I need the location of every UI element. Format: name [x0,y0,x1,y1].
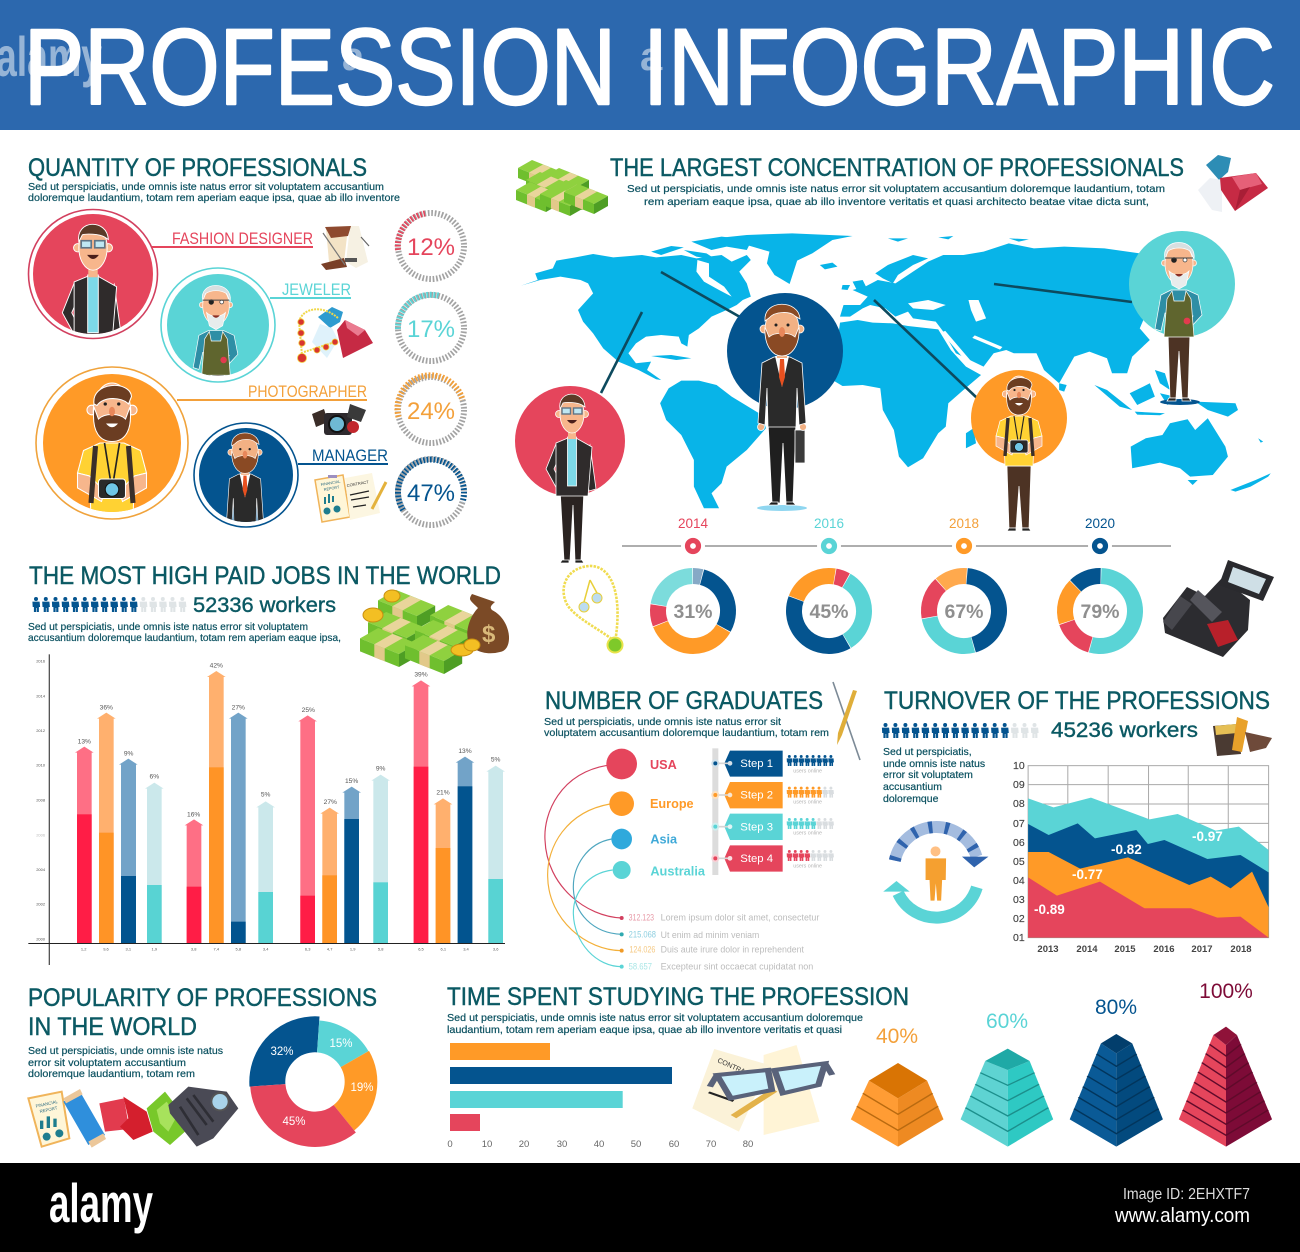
x axis labels [81,946,499,951]
percent labels: 5% [491,757,501,764]
icon: clipboard report and contract: REPORT [323,485,340,492]
percent labels: 25% [302,707,315,714]
x axis labels: 5,8 [236,946,242,951]
icons: report, spools, gems, camera [28,1087,238,1148]
y axis labels: 2008 [36,797,46,802]
icon: gems [1198,155,1268,212]
area chart value labels: -0.97 [1192,829,1223,844]
y axis labels: 2002 [36,902,46,907]
label: fashion designer: FASHION DESIGNER [172,230,313,248]
donut: 31%: 31% [673,601,713,623]
watermark text in banner: a [640,35,663,79]
icon: necklace and gems [298,307,373,362]
donut: 45% [781,563,877,659]
workers count: 45236: 45236 workers [1051,719,1198,742]
bar chart axis labels: 0 [447,1139,453,1150]
bar chart axis labels [447,1139,753,1150]
x axis labels: 3,1 [126,946,132,951]
heading: largest concentration: THE LARGEST CONCENTRATION OF PROFESSIONALS [610,154,1184,182]
x axis labels: 1,2 [81,946,87,951]
users online captions [793,768,822,869]
percent labels: 16% [187,812,200,819]
portrait: fashion designer [28,208,158,340]
description: high paid: Sed ut perspiciatis, unde omnis iste natus error sit voluptatem [28,621,308,633]
area chart y axis: 02 [1013,913,1025,925]
years: 2020 [1085,516,1115,531]
step 1 pictogram [787,755,834,766]
description: largest concentration: rem aperiam eaque ipsa, quae ab illo inventore veritatis et quasi architecto beatae vitae dicta sunt, [644,196,1149,208]
pyramid: 100%: 100% [1199,980,1253,1003]
description: popularity: doloremque laudantium, totam rem [28,1068,195,1080]
description: time spent: Sed ut perspiciatis, unde omnis iste natus error sit voluptatem accusantium doloremque [447,1012,863,1024]
step 3: Step 3 [740,821,773,833]
description: largest concentration [627,183,1165,208]
percent labels: 9% [376,766,386,773]
pyramid: 60%: 60% [986,1010,1028,1033]
x axis labels: 6,5 [418,946,425,951]
x axis labels: 7,4 [214,946,220,951]
statistics list: Ut enim ad minim veniam [661,930,759,940]
bar chart axis labels: 50 [631,1139,641,1150]
x axis labels: 9,6 [103,946,110,951]
label: photographer: PHOTOGRAPHER [248,383,367,401]
portrait: jeweler [160,267,276,383]
area chart y axis: 08 [1013,798,1025,810]
area chart y axis: 09 [1013,779,1025,791]
icon: camera lens and flash [1163,560,1274,657]
connecting curves [545,765,622,967]
step 3 pictogram [787,818,834,829]
icon: clipboard report and contract: FINANCIAL [320,480,341,487]
description: time spent [447,1012,863,1036]
horizontal bar chart [447,1043,753,1150]
axes [28,654,505,965]
bar chart axis labels: 80 [743,1139,753,1150]
timeline [622,516,1171,558]
watermark text in banner [0,25,663,88]
step 2: Step 2 [740,790,773,802]
description: high paid: accusantium doloremque laudantium, totam rem aperiam eaque ipsa, [28,632,341,644]
area chart y axis: 01 [1013,932,1025,944]
panel: most high paid jobs [28,562,509,965]
region names [650,758,706,878]
icon: clipboard report and contract [315,473,386,522]
y axis labels [36,658,46,942]
x axis labels: 6,3 [305,946,311,951]
description: quantity: Sed ut perspiciatis, unde omnis iste natus error sit voluptatem accusantium [28,181,384,193]
years: 2016 [814,516,844,531]
icons: report, spools, gems, camera: FINANCIAL [35,1099,59,1109]
bar chart axis labels: 70 [706,1139,716,1150]
footer bar with stock attribution [0,1163,1300,1252]
area chart y axis [1013,760,1025,944]
donut: 79% [1051,562,1149,660]
area chart x axis: 2015 [1114,944,1136,955]
icon: needle and pen [833,682,860,760]
description: graduates: Sed ut perspiciatis, unde omnis iste natus error sit [544,716,781,728]
description: popularity [28,1045,223,1080]
image id: Image ID: 2EHXTF7 [1123,1186,1250,1203]
donut: 79%: 79% [1080,601,1120,623]
x axis labels: 4,7 [327,946,333,951]
area chart y axis: 10 [1013,760,1025,772]
logo text: alamy [49,1172,153,1234]
percent labels: 21% [436,790,450,797]
pictogram: workers 45236 [882,723,1039,738]
title: PROFESSION [24,6,616,127]
statistics list: Lorem ipsum dolor sit amet, consectetur [661,913,819,923]
gauge: 47%: 47% [407,480,455,507]
region names: Asia [650,833,678,847]
step 2 pictogram [787,787,834,798]
icon: money and coin bag [360,590,509,674]
donut: 45%: 45% [809,601,849,623]
description: turnover: unde omnis iste natus [883,758,985,770]
icon: spool and pattern [321,226,369,270]
panel: largest concentration of professionals [515,154,1274,660]
icon: photo camera [312,404,366,435]
gauge: 17%: 17% [407,316,455,343]
panel: turnover of the professions [882,687,1272,955]
bar chart axis labels: 40 [594,1139,604,1150]
website: www.alamy.com [1114,1205,1250,1227]
description: graduates: voluptatem accusantium doloremque laudantium, totam rem [544,727,829,739]
watermark text in banner: alamy [0,25,102,88]
area chart y axis: 07 [1013,818,1025,830]
area chart x axis: 2017 [1191,944,1213,955]
icon: clipboard report and contract: CONTRACT [346,479,370,488]
icon: contract and glasses: CONTRACT [716,1057,755,1080]
figure: fashion designer [515,386,625,563]
area chart x axis: 2014 [1076,944,1098,955]
donut: 67%: 67% [944,601,984,623]
panel: number of graduates [544,682,860,971]
heading: quantity: QUANTITY OF PROFESSIONALS [28,154,367,182]
donut: 31% [645,563,741,659]
percent labels: 27% [324,799,337,806]
watermark text in banner: a [342,35,365,79]
heading: popularity: IN THE WORLD [28,1013,197,1041]
step tags [711,748,834,875]
panel: popularity of professions [28,984,382,1149]
pyramid: 80% [1070,996,1163,1147]
area chart [1028,766,1269,938]
statistics list: 215.068 [629,929,656,939]
heading: graduates: NUMBER OF GRADUATES [545,687,823,715]
x axis labels: 5,8 [378,946,384,951]
description: quantity: doloremque laudantium, totam rem aperiam eaque ipsa, quae ab illo inventore [28,192,400,204]
statistics list: 124.026 [629,945,655,955]
icon: necklace with emerald [564,566,622,652]
pictogram: workers 52336 [32,597,186,612]
pyramid: 40%: 40% [876,1025,918,1048]
bar chart axis labels: 20 [519,1139,529,1150]
title [24,6,1275,127]
connector lines [601,272,1132,398]
region names: Europe [650,797,694,811]
figure: manager [727,293,843,511]
region dots [606,749,637,969]
x axis labels: 3,4 [463,946,470,951]
figure: jeweler [1129,231,1235,405]
users online captions: users online [793,831,822,837]
gauge: 12% [398,213,464,279]
donut: popularity: 15% [329,1038,353,1050]
x axis labels: 6,1 [441,946,447,951]
y axis labels: 2012 [36,728,46,733]
description: turnover [883,746,985,805]
y axis labels: 2006 [36,832,46,837]
y axis labels: 2014 [36,693,46,698]
header banner with title [0,0,1300,130]
label: manager: MANAGER [312,447,388,465]
panel: quantity of professionals [28,158,467,528]
label: jeweler: JEWELER [282,281,351,299]
bar chart: high paid jobs [28,654,505,965]
heading: turnover: TURNOVER OF THE PROFESSIONS [884,687,1270,715]
statistics list: 58.657 [629,961,652,971]
gauge: 24%: 24% [407,398,455,425]
y axis labels: 2000 [36,937,46,942]
area chart x axis: 2018 [1230,944,1252,955]
percent labels: 6% [150,774,159,781]
donut: popularity: 19% [350,1082,374,1094]
y axis labels: 2010 [36,763,46,768]
region names: Australia [650,864,706,878]
x axis labels: 1,9 [152,946,158,951]
pyramid: 60% [961,1010,1053,1147]
icon: money and coin bag: $ [482,621,496,648]
donut: 67% [915,562,1013,660]
portrait: manager [193,422,299,528]
region list with curves [545,749,819,971]
description: turnover: doloremque [883,793,939,805]
icon: contract and glasses [692,1045,832,1135]
years: 2018 [949,516,979,531]
description: largest concentration: Sed ut perspiciatis, unde omnis iste natus error sit voluptatem accusantium doloremque laudantium, totam [627,183,1165,195]
percent labels: 13% [458,748,472,755]
x axis labels: 3,8 [191,946,197,951]
gauge: 24% [397,375,464,443]
percent labels: 39% [414,672,428,679]
bar chart axis labels: 30 [557,1139,567,1150]
area chart x axis [1037,944,1252,955]
x axis labels: 1,9 [350,946,356,951]
statistics list: Duis aute irure dolor in reprehendent [661,945,804,955]
description: time spent: laudantium, totam rem aperiam eaque ipsa, quae ab illo inventore veritatis et quasi [447,1024,842,1036]
step 1: Step 1 [740,758,773,770]
pyramid: 40% [851,1025,944,1147]
x axis labels: 3,4 [263,946,269,951]
y axis labels: 2004 [36,867,46,872]
area chart y axis: 03 [1013,894,1025,906]
users online captions: users online [793,863,822,869]
step 4: Step 4 [740,853,773,865]
percent labels: 13% [78,738,91,745]
area chart value labels: -0.77 [1072,867,1103,882]
statistics list [629,913,819,971]
region names: USA [650,758,677,772]
bar chart axis labels: 60 [669,1139,679,1150]
gauge: 47% [398,459,464,525]
donut: popularity: 45% [282,1116,306,1128]
percent labels: 27% [232,704,245,711]
years [678,516,1115,531]
area chart y axis: 06 [1013,837,1025,849]
description: graduates [544,716,829,739]
world map [521,233,1271,508]
area chart y axis: 05 [1013,856,1025,868]
area chart value labels: -0.89 [1034,902,1065,917]
area chart value labels [1034,829,1223,917]
gauge: 12%: 12% [407,234,455,261]
heading: time spent: TIME SPENT STUDYING THE PROFESSION [447,983,909,1011]
statistics list: Excepteur sint occaecat cupidatat non [661,961,813,971]
percent labels: 15% [345,778,358,785]
donut: popularity [248,1015,382,1149]
workers count: 52336: 52336 workers [193,594,336,617]
icons: report, spools, gems, camera: REPORT [39,1105,58,1114]
description: turnover: Sed ut perspiciatis, [883,746,972,758]
donut: popularity: 32% [270,1046,294,1058]
pyramid charts [851,980,1272,1147]
percent labels: 9% [124,750,134,757]
area chart x axis: 2013 [1037,944,1059,955]
panel: time spent studying the profession [447,980,1272,1150]
description: popularity: Sed ut perspiciatis, unde omnis iste natus [28,1045,223,1057]
users online captions: users online [793,768,822,774]
portrait: photographer [35,366,189,520]
heading: high paid jobs: THE MOST HIGH PAID JOBS IN THE WORLD [29,562,501,590]
heading: popularity [28,984,377,1041]
icon: rotation arrows with person [883,827,988,918]
pyramid: 80%: 80% [1095,996,1137,1019]
area chart y axis: 04 [1013,875,1025,887]
percent labels: 36% [100,704,113,711]
icon: memory card and film [1213,717,1272,756]
icon: stacks of cash [516,160,608,216]
percent labels: 5% [261,792,271,799]
gauge: 17% [398,295,464,361]
percent labels: 42% [210,663,223,670]
statistics list: 312.123 [629,913,654,923]
description: popularity: error sit voluptatem accusantium [28,1057,186,1069]
users online captions: users online [793,800,822,806]
bar chart axis labels: 10 [482,1139,492,1150]
area chart value labels: -0.82 [1111,842,1142,857]
description: high paid [28,621,341,644]
x axis labels: 3,6 [493,946,499,951]
y axis labels: 2016 [36,658,46,663]
pyramid: 100% [1179,980,1272,1147]
description: turnover: error sit voluptatem [883,769,973,781]
area chart x axis: 2016 [1153,944,1175,955]
description: quantity [28,181,400,204]
figure: photographer [971,370,1067,531]
percent labels [78,663,501,819]
heading: popularity: POPULARITY OF PROFESSIONS [28,984,377,1012]
description: turnover: accusantium [883,781,942,793]
years: 2014 [678,516,709,531]
step 4 pictogram [787,850,834,861]
